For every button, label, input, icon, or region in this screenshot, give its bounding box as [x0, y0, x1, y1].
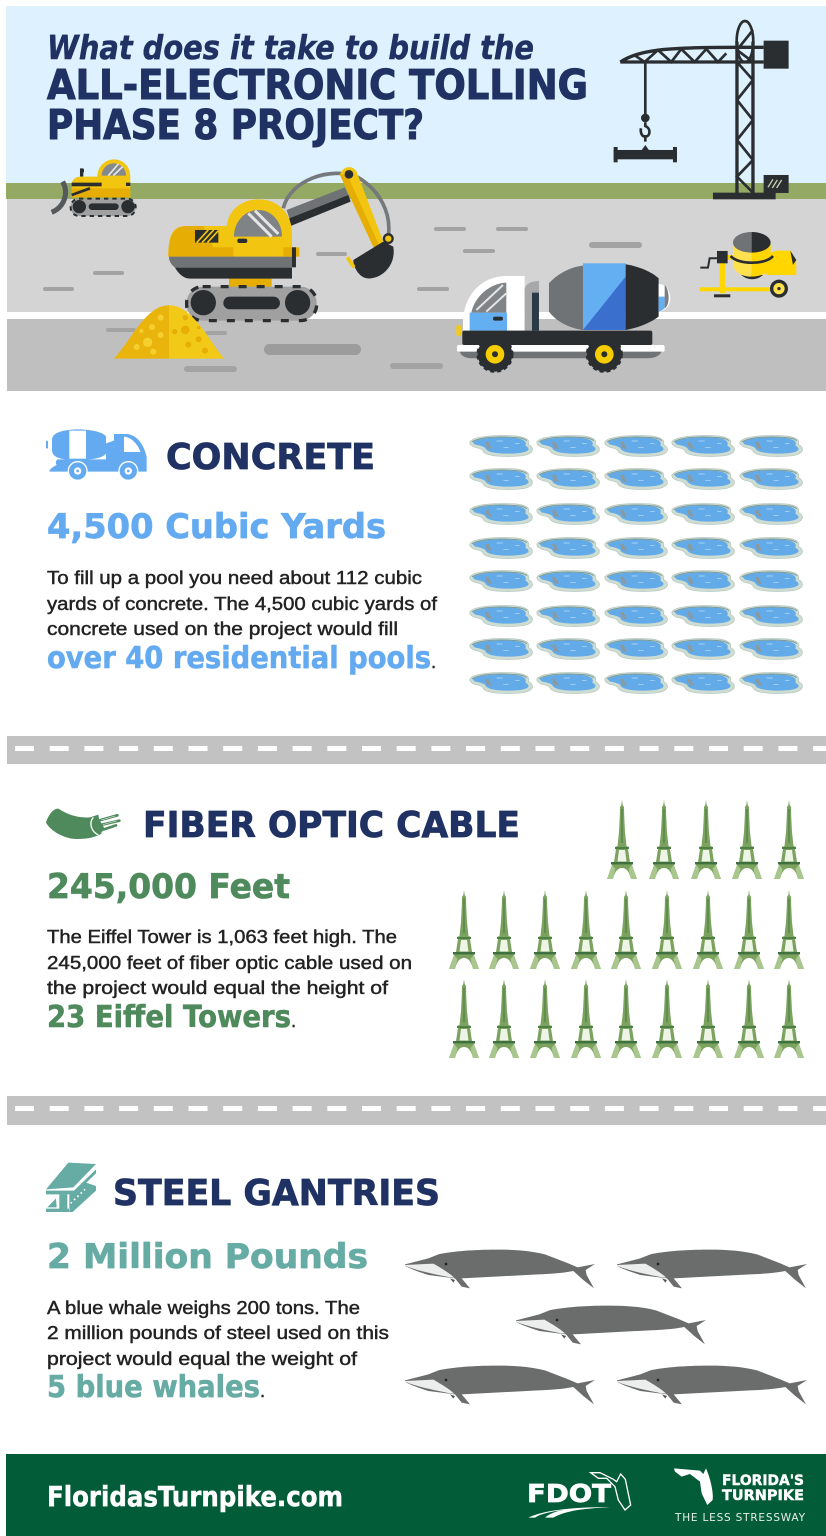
heading: steel gantries: STEEL GANTRIES — [113, 1173, 440, 1214]
text block: fiber comparison: . — [291, 1010, 296, 1031]
heading: fiber optic cable: FIBER OPTIC CABLE — [143, 805, 520, 846]
text block: steel comparison — [47, 1297, 389, 1405]
icon: fiber cable — [46, 809, 119, 839]
pictogram: 23 Eiffel Towers — [449, 800, 804, 1058]
logo: FDOT — [527, 1473, 631, 1518]
sand pile — [114, 305, 224, 359]
grass strip — [6, 183, 826, 199]
heading: concrete: CONCRETE — [166, 437, 375, 478]
stat: 4,500 cubic yards: 4,500 Cubic Yards — [47, 507, 386, 547]
header illustration panel — [6, 6, 826, 391]
title — [47, 28, 588, 149]
text block: concrete comparison: over 40 residential pools — [47, 641, 431, 676]
text block: fiber comparison: The Eiffel Tower is 1,063 feet high. The — [47, 926, 397, 947]
title: PHASE 8 PROJECT? — [47, 101, 424, 149]
text block: steel comparison: project would equal the weight of — [47, 1348, 358, 1369]
title: ALL-ELECTRONIC TOLLING — [47, 61, 588, 109]
stat: 2 million pounds: 2 Million Pounds — [47, 1237, 368, 1277]
text block: steel comparison: 5 blue whales — [47, 1370, 260, 1405]
footer — [6, 1454, 826, 1536]
text block: steel comparison: 2 million pounds of steel used on this — [47, 1322, 389, 1343]
panel: fiber optic cable — [46, 800, 804, 1058]
text block: fiber comparison: 245,000 feet of fiber optic cable used on — [47, 952, 412, 973]
logo: Florida's Turnpike: FLORIDA'S — [722, 1473, 804, 1489]
text block: fiber comparison: 23 Eiffel Towers — [47, 1000, 291, 1035]
logo: Florida's Turnpike — [674, 1468, 806, 1524]
road divider 2 — [7, 1096, 826, 1125]
icon: steel beam — [46, 1163, 96, 1212]
bulldozer — [52, 159, 136, 216]
text block: fiber comparison: the project would equal the height of — [47, 977, 389, 998]
website link: FloridasTurnpike.com — [47, 1480, 343, 1513]
pictogram: 5 blue whales — [405, 1250, 807, 1404]
text block: steel comparison: A blue whale weighs 200 tons. The — [47, 1297, 360, 1318]
panel: steel gantries — [46, 1163, 807, 1405]
crane — [614, 21, 789, 199]
text block: concrete comparison — [47, 567, 438, 676]
sky background — [6, 6, 826, 183]
text block: fiber comparison — [47, 926, 412, 1035]
logo: Florida's Turnpike: THE LESS STRESSWAY — [674, 1512, 806, 1524]
excavator — [168, 167, 394, 321]
panel: concrete — [46, 429, 803, 693]
icon: concrete truck — [46, 429, 147, 480]
portable cement mixer — [700, 232, 796, 298]
text block: concrete comparison: . — [431, 651, 436, 672]
stat: 245,000 feet: 245,000 Feet — [47, 867, 290, 907]
text block: concrete comparison: yards of concrete. The 4,500 cubic yards of — [47, 593, 438, 614]
pictogram: 40 pools — [470, 435, 803, 693]
text block: concrete comparison: To fill up a pool you need about 112 cubic — [47, 567, 422, 588]
concrete mixer truck — [456, 263, 670, 372]
logo: FDOT: FDOT — [527, 1479, 611, 1508]
text block: steel comparison: . — [260, 1380, 265, 1401]
road divider 1 — [7, 736, 826, 764]
title: What does it take to build the — [47, 28, 534, 67]
logo: Florida's Turnpike: TURNPIKE — [722, 1488, 804, 1504]
text block: concrete comparison: concrete used on the project would fill — [47, 618, 398, 639]
road — [7, 199, 826, 391]
